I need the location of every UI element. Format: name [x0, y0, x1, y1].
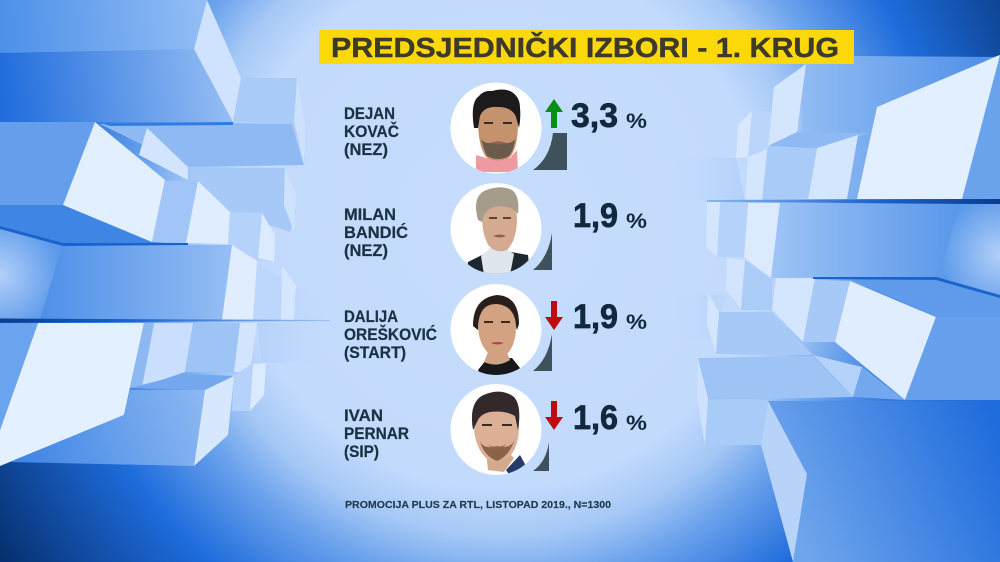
name	[344, 104, 399, 159]
value: 1,9	[573, 298, 618, 336]
arrow down	[545, 401, 563, 430]
name: (SIP)	[344, 442, 379, 461]
ramp bar	[533, 133, 567, 170]
value	[573, 197, 647, 235]
value	[571, 97, 647, 135]
ramp bar	[533, 334, 552, 371]
portrait	[450, 384, 542, 476]
name	[344, 406, 409, 461]
background: right 3D blocks	[670, 55, 1000, 562]
name: OREŠKOVIĆ	[344, 325, 437, 344]
name: (NEZ)	[344, 241, 388, 260]
value: 1,6	[573, 399, 618, 437]
name: PERNAR	[344, 424, 409, 443]
name: DEJAN	[344, 104, 395, 123]
value: %	[626, 412, 647, 435]
value: 3,3	[571, 97, 618, 135]
name: (START)	[344, 343, 406, 362]
portrait	[450, 82, 542, 174]
name: BANDIĆ	[344, 223, 408, 242]
ramp bar	[533, 233, 552, 270]
portrait	[450, 284, 542, 376]
name: IVAN	[344, 406, 383, 425]
arrow down	[545, 301, 563, 330]
value: %	[626, 110, 647, 133]
ramp bar	[533, 442, 549, 471]
name: (NEZ)	[344, 140, 388, 159]
candidate row: Dalija Orešković	[344, 284, 647, 376]
name: MILAN	[344, 205, 396, 224]
value: 1,9	[573, 197, 618, 235]
background: left 3D blocks	[0, 0, 330, 466]
portrait	[450, 183, 542, 275]
name	[344, 205, 408, 260]
value: %	[626, 311, 647, 334]
value	[573, 298, 647, 336]
name: KOVAČ	[344, 122, 399, 141]
value	[573, 399, 647, 437]
value: %	[626, 210, 647, 233]
name	[344, 307, 437, 362]
arrow up	[545, 99, 563, 128]
source note: PROMOCIJA PLUS ZA RTL, LISTOPAD 2019., N=1300	[345, 499, 611, 511]
name: DALIJA	[344, 307, 398, 326]
candidate row: Ivan Pernar	[344, 384, 647, 476]
candidate row: Dejan Kovač	[344, 82, 647, 174]
title banner: PREDSJEDNIČKI IZBORI - 1. KRUG	[331, 31, 839, 63]
candidate row: Milan Bandić	[344, 183, 647, 275]
